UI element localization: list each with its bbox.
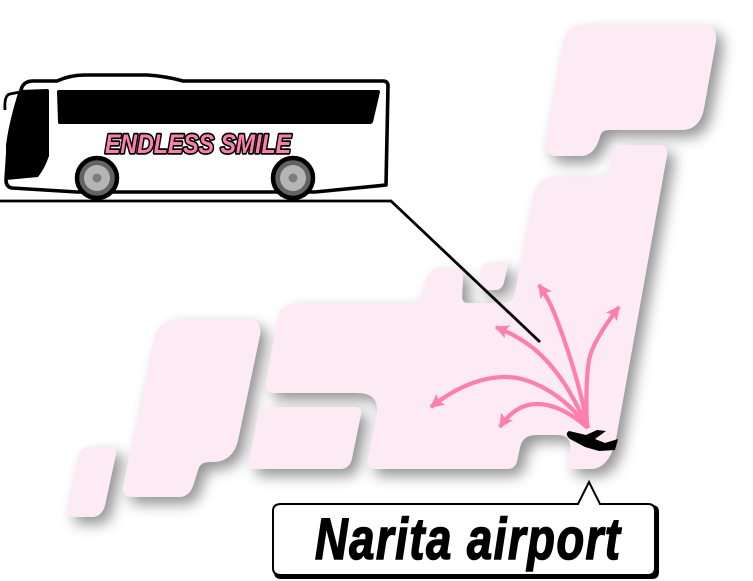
callout: Narita airport — [273, 482, 659, 579]
bus body — [6, 75, 388, 192]
arrow: west — [431, 377, 588, 428]
bus — [5, 75, 388, 198]
bus windscreen — [6, 89, 49, 180]
rear wheel — [273, 158, 313, 198]
island: Sado — [478, 263, 507, 290]
route arrows from Narita — [431, 285, 619, 428]
callout text: Narita airport — [315, 508, 622, 572]
island: Hokkaido — [545, 25, 716, 156]
arrow: north — [539, 285, 588, 428]
bus mirror — [5, 92, 20, 110]
island: Okinawa — [67, 447, 116, 517]
map of Japan — [67, 25, 716, 517]
arrow: north-west — [496, 327, 588, 428]
callout bubble — [274, 482, 659, 579]
island: Kyushu — [123, 319, 260, 497]
island: Shikoku — [249, 407, 361, 469]
front wheel — [77, 158, 117, 198]
icon: airplane — [567, 430, 618, 451]
leader line from bus to map — [0, 201, 540, 342]
bus window — [57, 90, 380, 124]
arrow: north-east — [586, 307, 619, 428]
island: Honshu — [266, 145, 667, 469]
arrow: south-west — [500, 404, 588, 428]
bus name: ENDLESS SMILE — [105, 129, 292, 159]
